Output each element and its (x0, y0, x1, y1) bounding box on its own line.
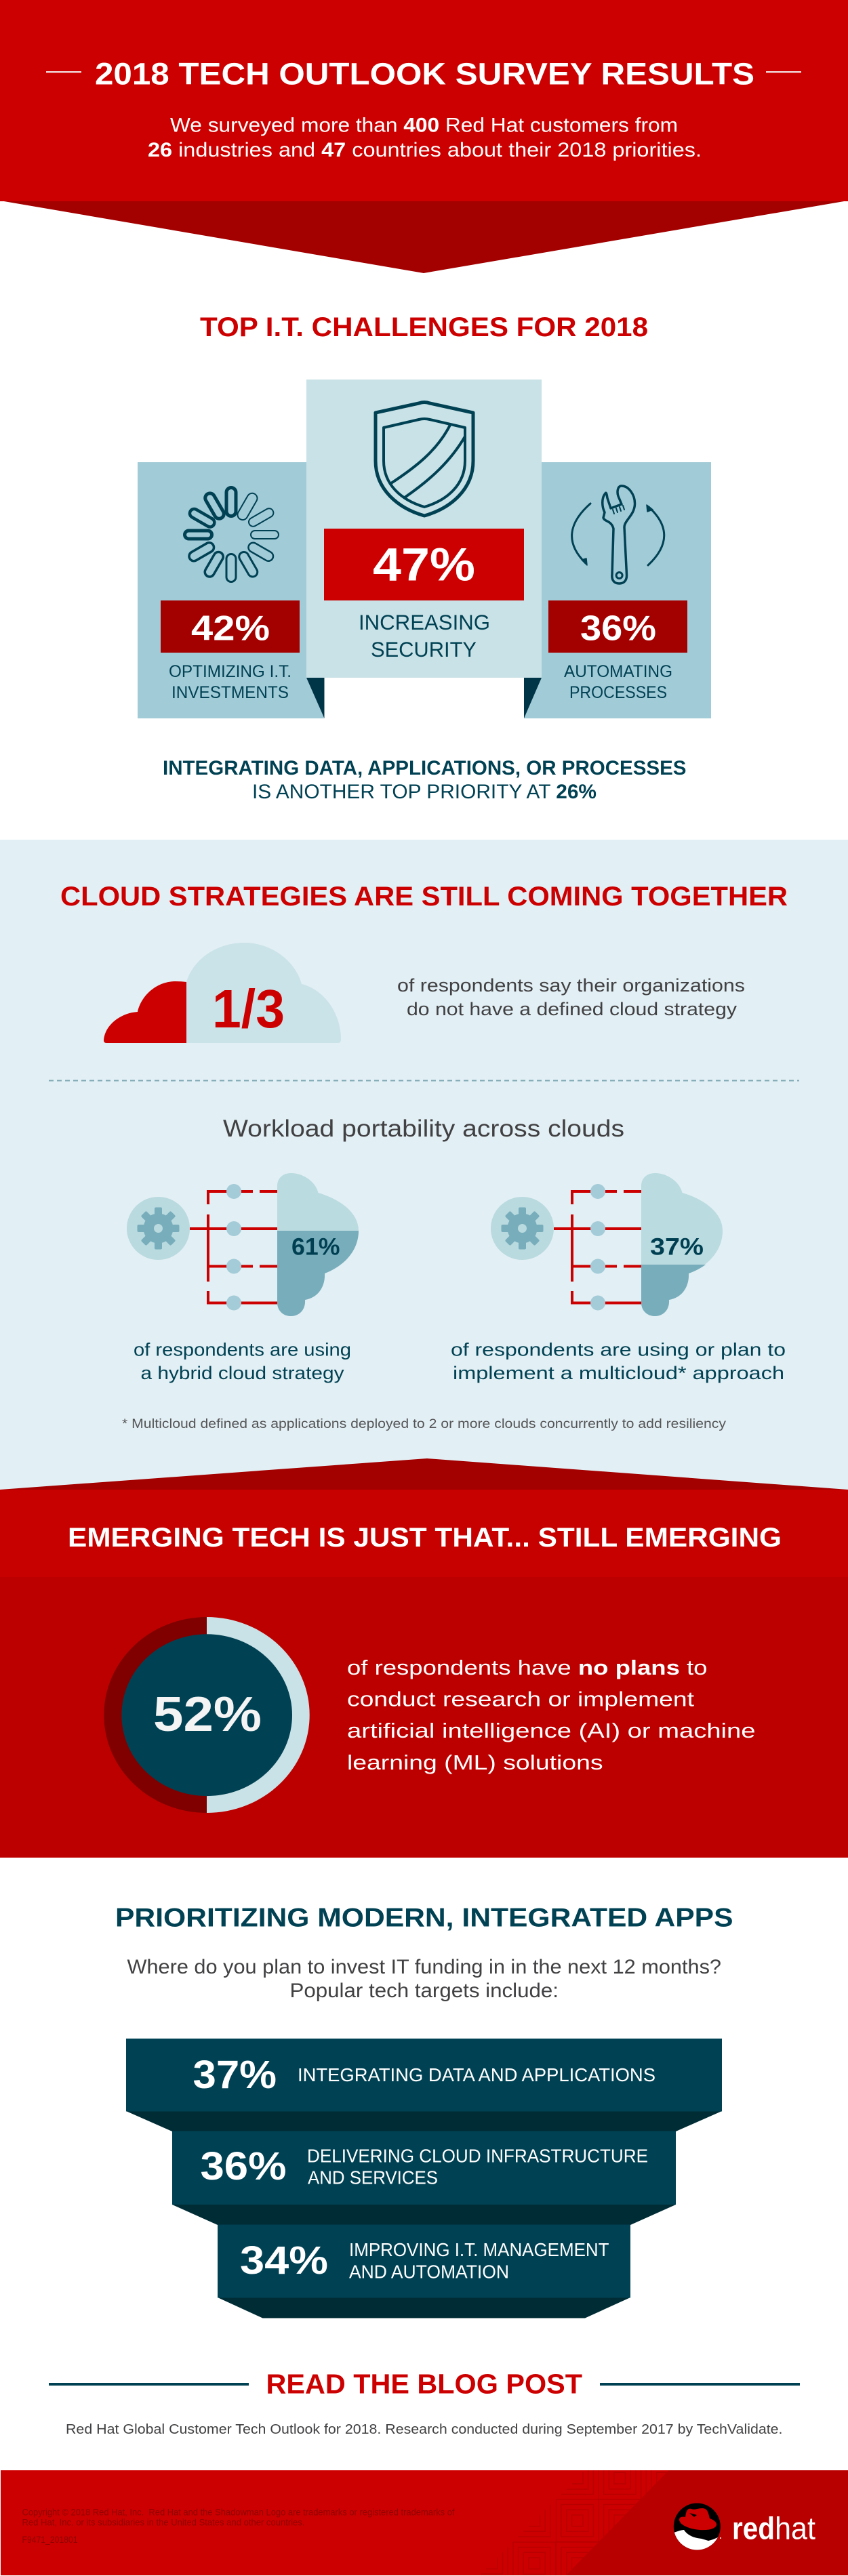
header chevron (0, 201, 848, 273)
stat box 47% (324, 529, 524, 600)
funnel level 37% (126, 2039, 722, 2131)
caption: multicloud (451, 1339, 786, 1383)
connector dots (590, 1184, 605, 1311)
text: funding question: Popular tech targets include: (290, 1980, 559, 2002)
text: no defined cloud strategy: do not have a defined cloud strategy (407, 999, 738, 1019)
funnel level 34%: AND AUTOMATION (349, 2261, 509, 2283)
panel: optimizing IT investments (138, 462, 324, 718)
icon: wrench with arrows (572, 486, 664, 584)
call to action: read the blog post: READ THE BLOG POST (266, 2368, 582, 2399)
gear node (127, 1197, 190, 1260)
text: no plans for AI (347, 1656, 755, 1774)
label: increasing security: SECURITY (371, 637, 477, 661)
copyright text: Copyright © 2018 Red Hat, Inc. Red Hat and the Shadowman Logo are trademarks or registered trademarks of (22, 2506, 455, 2517)
funnel level 36%: 36% (201, 2144, 286, 2188)
connector dots (226, 1184, 241, 1311)
text: no defined cloud strategy: of respondents say their organizations (397, 975, 745, 996)
panel: automating processes (524, 462, 711, 718)
cloud gauge 61% (277, 1173, 359, 1316)
header intro text: We surveyed more than 400 Red Hat customers from (170, 114, 678, 137)
fold triangle right (524, 678, 542, 718)
caption: multicloud: implement a multicloud* approach (453, 1363, 784, 1383)
header intro text (148, 114, 702, 161)
header intro text: 26 industries and 47 countries about their 2018 priorities. (148, 139, 702, 161)
heading: cloud strategies: CLOUD STRATEGIES ARE STILL COMING TOGETHER (60, 882, 788, 912)
funnel level 36% (172, 2131, 676, 2225)
text: funding question (127, 1956, 721, 2002)
label: automating: PROCESSES (569, 683, 667, 702)
label: automating: AUTOMATING (564, 662, 672, 681)
label: optimizing: INVESTMENTS (171, 683, 289, 702)
icon: loading spinner (184, 488, 279, 581)
cloud gauge 37%: 37% (650, 1233, 704, 1261)
panel: footer (1, 2470, 848, 2575)
funnel level 34% (218, 2224, 630, 2318)
header red background (0, 0, 848, 201)
cloud gauge 61%: 61% (291, 1233, 340, 1261)
caption: multicloud: of respondents are using or plan to (451, 1339, 786, 1359)
title: 2018 TECH OUTLOOK SURVEY RESULTS (95, 57, 754, 91)
panel: emerging tech (0, 1458, 848, 1858)
heading: top IT challenges: TOP I.T. CHALLENGES FOR 2018 (200, 312, 648, 342)
diagram: hybrid cloud 61% (127, 1173, 359, 1383)
stat box 42% (161, 600, 300, 653)
donut chart 52%: 52% (153, 1688, 262, 1742)
caption: hybrid: a hybrid cloud strategy (141, 1363, 344, 1383)
icon: one third cloud: 1/3 (212, 979, 285, 1039)
roof chevron (0, 1458, 848, 1490)
text: no defined cloud strategy (397, 975, 745, 1019)
panel: cloud strategies (0, 840, 848, 1490)
icon: shield (376, 403, 473, 516)
label: optimizing (169, 662, 291, 702)
cloud gauge 37% (641, 1173, 723, 1316)
copyright text: Red Hat, Inc. or its subsidiaries in the United States and other countries. (22, 2517, 305, 2528)
heading: prioritizing modern apps: PRIORITIZING MODERN, INTEGRATED APPS (115, 1903, 733, 1933)
text: no plans for AI: artificial intelligence (AI) or machine (347, 1719, 755, 1742)
text: no plans for AI: learning (ML) solutions (347, 1751, 603, 1774)
copyright text: F9471_201801 (22, 2534, 78, 2545)
footnote: multicloud definition: * Multicloud defined as applications deployed to 2 or more clouds concurrently to add resiliency (122, 1417, 727, 1431)
gear node (491, 1197, 554, 1260)
text: no plans for AI: of respondents have no plans to (347, 1656, 708, 1679)
funnel level 36%: DELIVERING CLOUD INFRASTRUCTURE (307, 2146, 648, 2166)
stat box 47%: 47% (373, 538, 475, 591)
funnel level 37%: INTEGRATING DATA AND APPLICATIONS (298, 2064, 655, 2085)
stat box 36%: 36% (580, 609, 656, 648)
funnel level 34%: IMPROVING I.T. MANAGEMENT (349, 2239, 609, 2260)
caption: hybrid (134, 1339, 351, 1383)
logo: Red Hat: red (732, 2510, 775, 2546)
call to action: read the blog post (49, 2368, 800, 2399)
caption: hybrid: of respondents are using (134, 1339, 351, 1359)
funnel level 36%: AND SERVICES (308, 2167, 438, 2188)
heading: emerging tech: EMERGING TECH IS JUST THAT... STILL EMERGING (68, 1523, 782, 1553)
logo: Red Hat (674, 2503, 815, 2550)
label: increasing security: INCREASING (359, 610, 490, 634)
panel: header banner (0, 0, 848, 273)
funnel level 34%: 34% (240, 2238, 328, 2283)
subheading: workload portability: Workload portability across clouds (223, 1116, 624, 1142)
panel: increasing security (306, 380, 542, 678)
label: automating (564, 662, 672, 702)
text: research source: Red Hat Global Customer Tech Outlook for 2018. Research conducted during September 2017 by TechValidate. (66, 2422, 782, 2437)
label: optimizing: OPTIMIZING I.T. (169, 662, 291, 681)
connector lines (190, 1191, 277, 1303)
donut chart 52% (104, 1617, 310, 1813)
funnel level 37%: 37% (193, 2053, 277, 2097)
callout: integrating data priority (163, 757, 686, 803)
icon: one third cloud (104, 943, 341, 1043)
logo: Red Hat: hat (775, 2510, 815, 2546)
darker corner panel (566, 2470, 848, 2575)
text: funding question: Where do you plan to invest IT funding in in the next 12 months? (127, 1956, 721, 1978)
funnel chart: tech targets (126, 2039, 722, 2318)
callout: integrating data priority: INTEGRATING DATA, APPLICATIONS, OR PROCESSES (163, 757, 686, 779)
stat box 36% (548, 600, 687, 653)
stat box 42%: 42% (191, 609, 270, 648)
label: increasing security (359, 610, 490, 661)
connector lines (554, 1191, 641, 1303)
copyright text (22, 2506, 455, 2545)
text: no plans for AI: conduct research or implement (347, 1688, 694, 1711)
callout: integrating data priority: IS ANOTHER TOP PRIORITY AT 26% (252, 781, 597, 803)
diagram: multicloud 37% (451, 1173, 786, 1383)
fold triangle left (306, 678, 324, 718)
